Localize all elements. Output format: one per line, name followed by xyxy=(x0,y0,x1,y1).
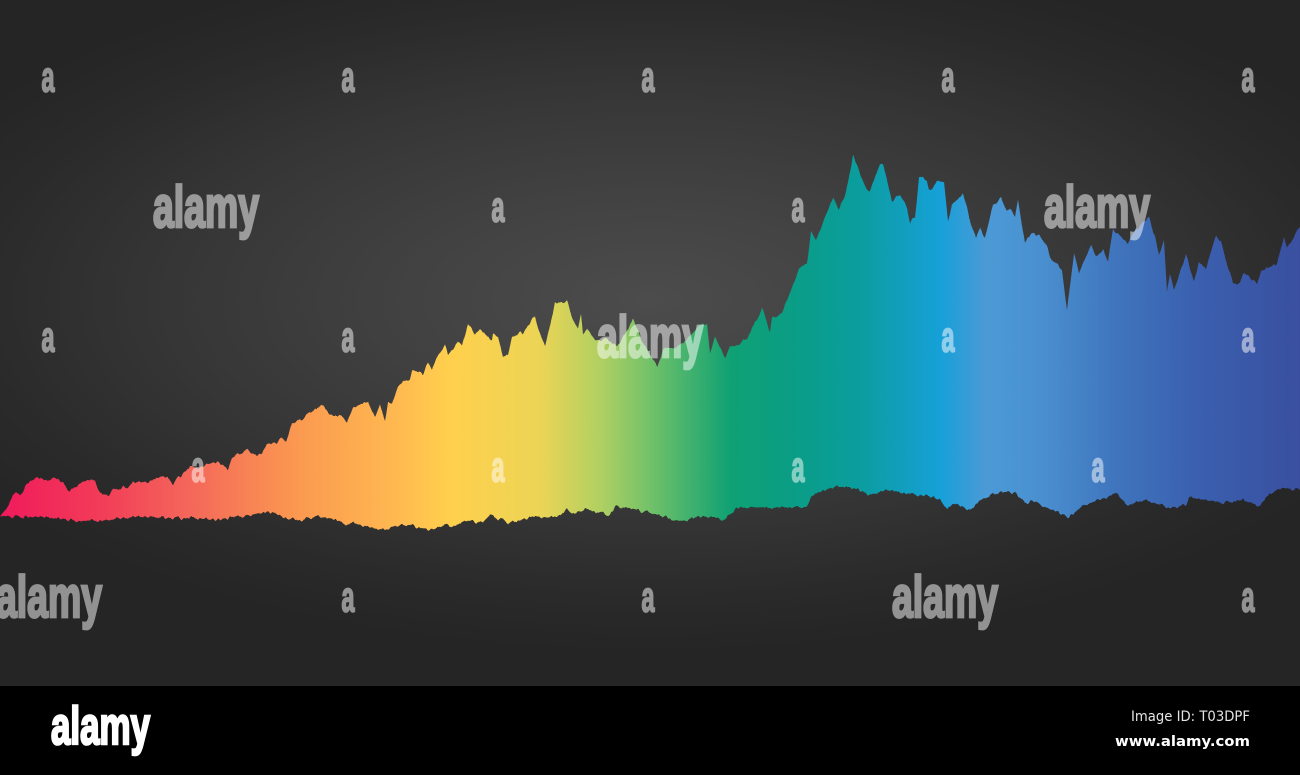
watermark row 3: alamy xyxy=(597,305,703,370)
watermark row 1 xyxy=(42,54,1255,102)
watermark layer xyxy=(0,54,1255,630)
footer website: www.alamy.com xyxy=(1115,734,1250,750)
watermark row 4: a xyxy=(492,444,505,492)
watermark row 1: a xyxy=(942,54,955,102)
watermark row 2 xyxy=(153,175,1150,240)
watermark row 2: alamy xyxy=(153,175,259,240)
watermark row 3: a xyxy=(1242,314,1255,362)
watermark row 1: a xyxy=(342,54,355,102)
footer image id: Image ID: T03DPF xyxy=(1131,709,1250,725)
watermark row 1: a xyxy=(42,54,55,102)
watermark row 3: a xyxy=(342,314,355,362)
watermark row 3: a xyxy=(42,314,55,362)
watermark row 5: alamy xyxy=(0,565,102,630)
watermark row 4: a xyxy=(792,444,805,492)
watermark row 4 xyxy=(192,444,1105,492)
watermark row 5: a xyxy=(1242,574,1255,622)
watermark row 3: a xyxy=(942,314,955,362)
watermark row 4: a xyxy=(192,444,205,492)
black footer bar xyxy=(0,686,1300,775)
watermark row 5: a xyxy=(642,574,655,622)
watermark row 4: a xyxy=(1092,444,1105,492)
rainbow spectrum area chart xyxy=(0,155,1300,530)
watermark row 5: a xyxy=(342,574,355,622)
watermark row 1: a xyxy=(1242,54,1255,102)
watermark row 2: alamy xyxy=(1044,175,1150,240)
footer logo: alamy xyxy=(51,697,150,756)
watermark row 3 xyxy=(42,305,1255,370)
watermark row 2: a xyxy=(492,184,505,232)
watermark row 5 xyxy=(0,565,1255,630)
watermark row 2: a xyxy=(792,184,805,232)
watermark row 1: a xyxy=(642,54,655,102)
watermark row 5: alamy xyxy=(892,565,998,630)
